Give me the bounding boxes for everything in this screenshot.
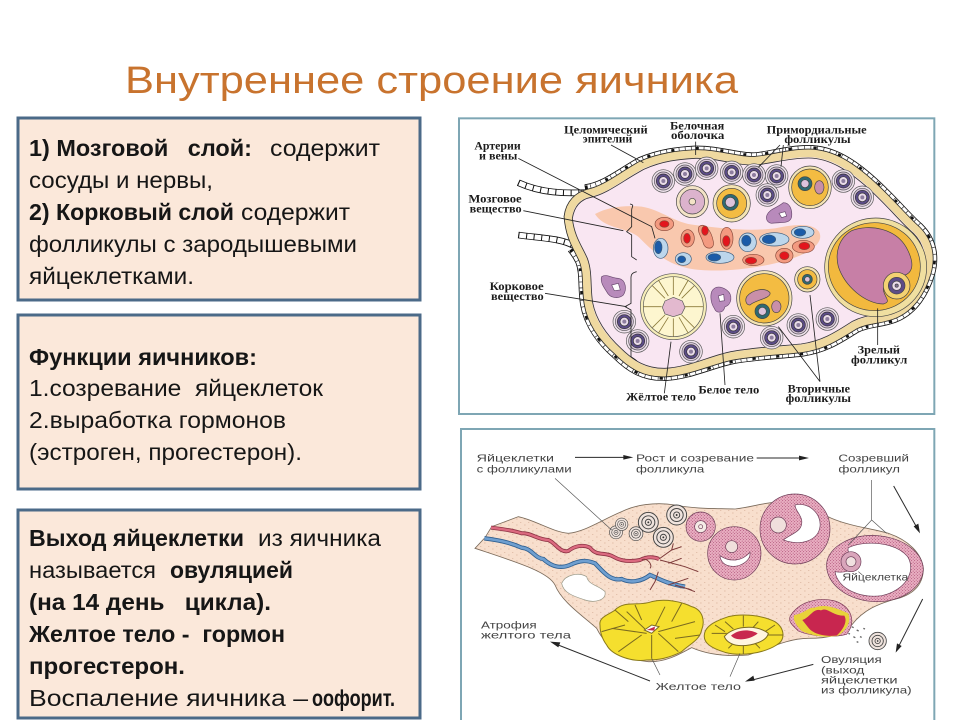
mature follicle xyxy=(825,218,927,317)
released egg xyxy=(848,627,886,650)
diagram labels: фолликулы xyxy=(784,132,851,146)
panel: layers of the ovary: яйцеклетками. xyxy=(29,263,194,289)
diagram labels: Жёлтое тело xyxy=(626,390,696,404)
diagram labels: Яйцеклетки xyxy=(477,454,554,465)
panel: functions of the ovaries: Функции яичников: xyxy=(29,344,257,370)
diagram labels: желтого тела xyxy=(481,630,572,641)
panel: layers of the ovary: содержит xyxy=(270,135,380,161)
diagram labels: фолликула xyxy=(636,464,705,475)
diagram labels: Вторичные xyxy=(788,382,851,396)
diagram labels: фолликул xyxy=(838,464,900,475)
panel: layers of the ovary: содержит xyxy=(241,199,350,225)
diagram labels: Мозговое xyxy=(468,192,522,206)
corpus luteum medium xyxy=(704,615,783,654)
panel: layers of the ovary: 2) Корковый слой xyxy=(29,199,234,225)
diagram labels: яйцеклетки xyxy=(821,676,898,687)
diagram labels: Артерии xyxy=(474,139,521,153)
diagram labels xyxy=(477,454,912,697)
panel: ovulation: из яичника xyxy=(258,525,381,551)
diagram labels: из фолликула) xyxy=(821,686,912,697)
mature follicle xyxy=(827,535,923,602)
diagram labels: (выход xyxy=(821,665,865,676)
panel: ovulation: прогестерон. xyxy=(29,653,185,679)
panel: layers of the ovary xyxy=(18,118,420,300)
diagram labels: и вены xyxy=(479,148,518,162)
diagram labels: фолликулы xyxy=(786,391,852,405)
panel: ovulation: (на 14 день цикла). xyxy=(29,589,271,615)
ovary body xyxy=(568,153,929,373)
title: Внутреннее строение яичника xyxy=(125,60,739,102)
ovulating follicle xyxy=(790,599,852,637)
panel: functions of the ovaries xyxy=(18,315,420,489)
corpus luteum large xyxy=(600,600,703,660)
blood vessels: veins xyxy=(653,226,814,265)
corpus luteum xyxy=(640,274,706,340)
ovary tissue xyxy=(475,502,923,662)
panel: ovary structure diagram xyxy=(459,118,934,414)
panel: ovulation: называется xyxy=(29,557,156,583)
epithelium layer xyxy=(518,153,929,373)
panel: functions of the ovaries: 2.выработка гормонов xyxy=(29,407,286,433)
leader lines xyxy=(518,142,878,393)
blood vessels: arteries xyxy=(655,217,814,266)
diagram labels: фолликул xyxy=(851,352,908,366)
arrows xyxy=(550,455,923,682)
diagram labels: Примордиальные xyxy=(767,122,867,136)
diagram labels: Яйцеклетка xyxy=(842,572,909,583)
panel: ovulation cycle diagram xyxy=(461,429,934,720)
diagram labels: с фолликулами xyxy=(477,464,572,475)
diagram labels: Зрелый xyxy=(858,342,900,356)
corpus albicans xyxy=(562,574,605,601)
diagram labels: Белое тело xyxy=(698,382,759,396)
small follicles xyxy=(609,505,687,547)
diagram labels xyxy=(468,118,908,405)
panel: functions of the ovaries: 1.созревание яйцеклеток xyxy=(29,375,324,401)
panel: ovulation: Воспаление яичника – xyxy=(29,685,308,711)
panel: layers of the ovary: фолликулы с зародышевыми xyxy=(29,231,357,257)
artery xyxy=(491,528,659,561)
diagram labels: Целомический xyxy=(564,122,648,136)
medulla xyxy=(595,206,820,271)
diagram labels: Созревший xyxy=(838,454,909,465)
panel: ovulation: Желтое тело - гормон xyxy=(28,621,285,647)
diagram labels: Овуляция xyxy=(821,655,882,666)
diagram labels: оболочка xyxy=(671,128,724,142)
panel: ovulation: овуляцией xyxy=(170,557,293,583)
panel: ovulation: оофорит. xyxy=(312,685,395,711)
panel: ovulation xyxy=(18,510,420,718)
panel: ovulation: Выход яйцеклетки xyxy=(29,525,244,551)
corpus albicans xyxy=(601,203,792,312)
diagram labels: Рост и созревание xyxy=(636,454,754,465)
diagram labels: Корковое xyxy=(490,279,544,293)
diagram labels: вещество xyxy=(470,202,522,216)
diagram labels: вещество xyxy=(491,289,544,303)
diagram labels: Белочная xyxy=(670,118,725,132)
diagram labels: эпителий xyxy=(583,132,632,146)
primordial follicles xyxy=(613,157,874,363)
vein xyxy=(484,538,685,587)
vessel branches xyxy=(642,543,698,592)
panel: layers of the ovary: 1) Мозговой слой: xyxy=(29,135,252,161)
panel: layers of the ovary: сосуды и нервы, xyxy=(29,167,213,193)
diagram labels: Желтое тело xyxy=(656,682,741,693)
panel: functions of the ovaries: (эстроген, прогестерон). xyxy=(29,439,302,465)
leader lines xyxy=(555,478,887,677)
growing follicles xyxy=(686,494,830,580)
diagram labels: Атрофия xyxy=(481,620,537,631)
growing follicles xyxy=(676,166,831,326)
